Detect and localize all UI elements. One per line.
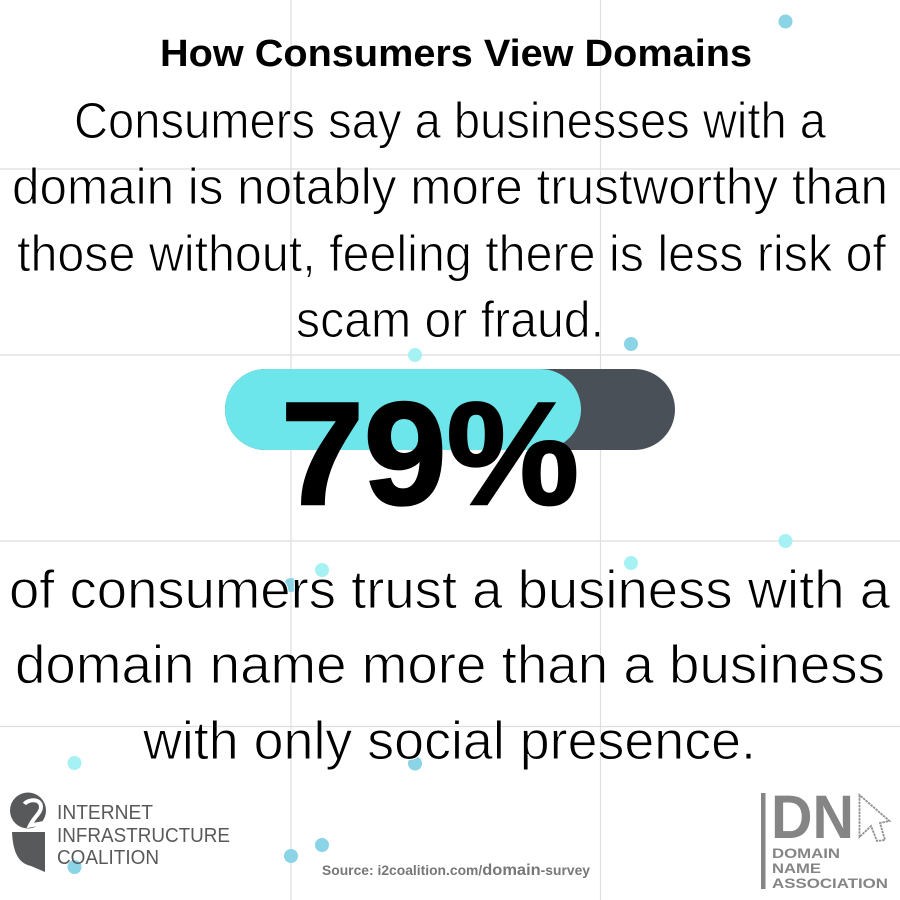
logo wordmark: DOMAIN xyxy=(772,845,840,861)
logo wordmark: ASSOCIATION xyxy=(772,875,888,891)
title: How Consumers View Domains xyxy=(160,33,752,75)
supporting statement xyxy=(9,560,891,771)
logo wordmark: COALITION xyxy=(57,846,159,869)
source note: Source: i2coalition.com/ domain-survey xyxy=(322,862,591,879)
logo wordmark: NAME xyxy=(772,860,821,876)
logo: Internet Infrastructure Coalition xyxy=(10,792,230,872)
logo wordmark: INTERNET xyxy=(57,801,153,824)
background dots xyxy=(68,14,792,874)
intro paragraph: domain is notably more trustworthy than xyxy=(12,158,888,215)
intro paragraph xyxy=(12,92,888,348)
logo wordmark xyxy=(57,801,230,869)
logo wordmark xyxy=(772,845,888,891)
progress bar xyxy=(225,369,675,450)
supporting statement: of consumers trust a business with a xyxy=(9,560,891,620)
intro paragraph: scam or fraud. xyxy=(296,291,604,348)
big percentage: 79% xyxy=(281,372,579,535)
logo wordmark: INFRASTRUCTURE xyxy=(57,824,230,847)
icon: i2 mark xyxy=(10,792,47,872)
logo: Domain Name Association xyxy=(761,783,890,891)
intro paragraph: Consumers say a businesses with a xyxy=(74,92,827,149)
logo letters DN: DN xyxy=(771,783,854,851)
supporting statement: domain name more than a business xyxy=(15,635,885,695)
supporting statement: with only social presence. xyxy=(142,711,756,771)
icon: pixel cursor xyxy=(860,795,890,841)
